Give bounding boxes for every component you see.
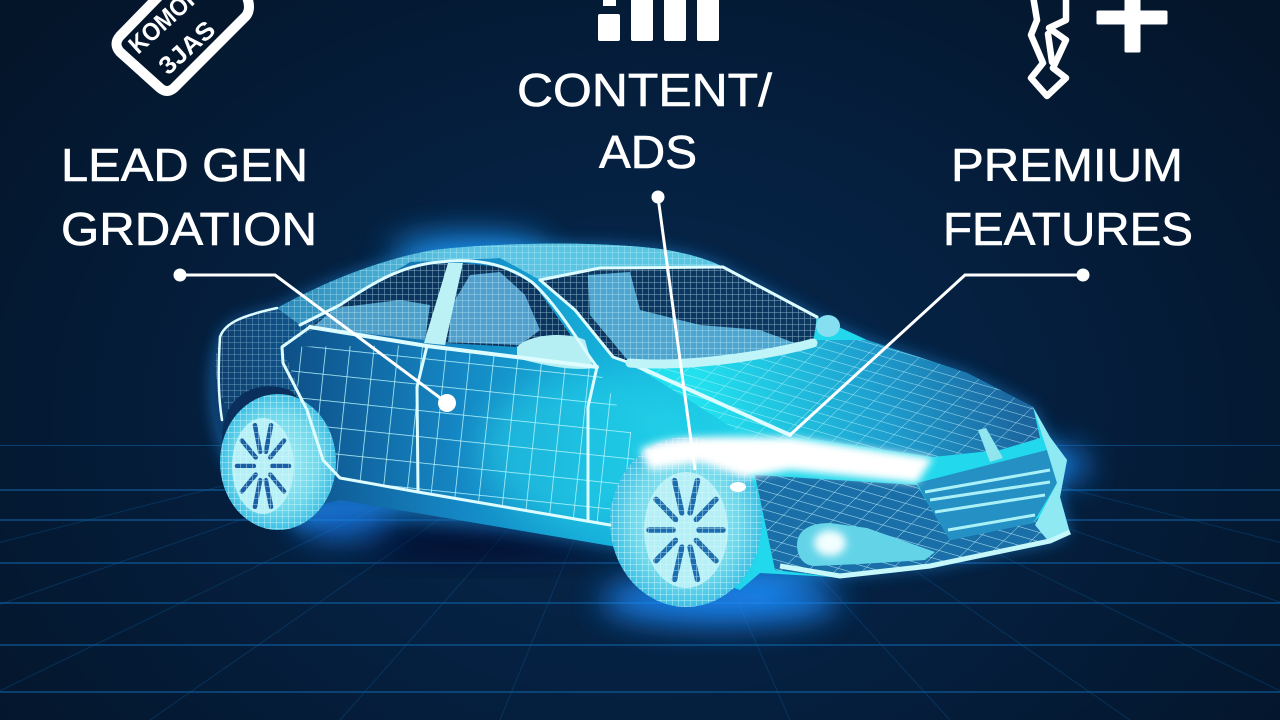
label: content ads: ADS — [599, 126, 697, 178]
B pillar — [424, 263, 463, 345]
rear quarter window — [310, 263, 448, 340]
grille badge — [978, 428, 1003, 462]
door mesh — [282, 345, 640, 525]
connector: content ads — [652, 190, 746, 492]
icon: bar chart — [598, 0, 719, 41]
icon: key — [1031, 0, 1066, 96]
label: content ads: CONTENT/ — [517, 64, 772, 116]
label: lead gen: GRDATION — [61, 203, 317, 255]
icon: price tag: 3JAS — [153, 15, 221, 80]
perspective floor grid — [0, 445, 1280, 720]
windshield — [540, 267, 817, 363]
icon: plus — [1098, 0, 1166, 51]
wing mirror — [816, 315, 840, 337]
label: premium features: FEATURES — [943, 203, 1193, 255]
roof band — [277, 244, 723, 325]
connector: premium features — [790, 268, 1090, 435]
label: content ads — [517, 64, 772, 178]
label: lead gen — [61, 139, 317, 255]
side mirror — [517, 335, 593, 369]
right bumper highlight — [1033, 407, 1070, 543]
fascia mesh — [755, 475, 1070, 577]
grille — [917, 450, 1057, 540]
front side window — [445, 263, 590, 362]
label: premium features: PREMIUM — [951, 139, 1183, 191]
icon: price tag — [116, 0, 249, 91]
grille bars — [925, 470, 1050, 530]
car body — [211, 244, 1070, 590]
lower bumper edge — [780, 532, 1070, 576]
hood — [630, 340, 1040, 457]
fog lamp — [814, 530, 846, 556]
front fascia — [755, 475, 1070, 577]
hood white highlight — [640, 437, 933, 483]
window mesh — [310, 263, 817, 363]
roof mesh — [277, 244, 723, 325]
front seat — [448, 272, 540, 345]
connector: lead gen — [174, 268, 456, 412]
rear seat — [312, 300, 430, 340]
rear wheel — [220, 394, 336, 530]
hood mesh — [630, 340, 1040, 457]
rear panel mesh — [215, 308, 330, 420]
label: lead gen: LEAD GEN — [61, 139, 308, 191]
front wheel — [610, 437, 762, 607]
interior seat and dash — [588, 272, 800, 363]
body outlines — [219, 261, 817, 525]
car illustration — [211, 244, 1070, 607]
rear wheel arch shadow — [222, 386, 320, 450]
door glow — [480, 375, 700, 525]
label: premium features — [943, 139, 1193, 255]
glow behind car — [211, 234, 1087, 624]
fog light — [797, 523, 935, 566]
